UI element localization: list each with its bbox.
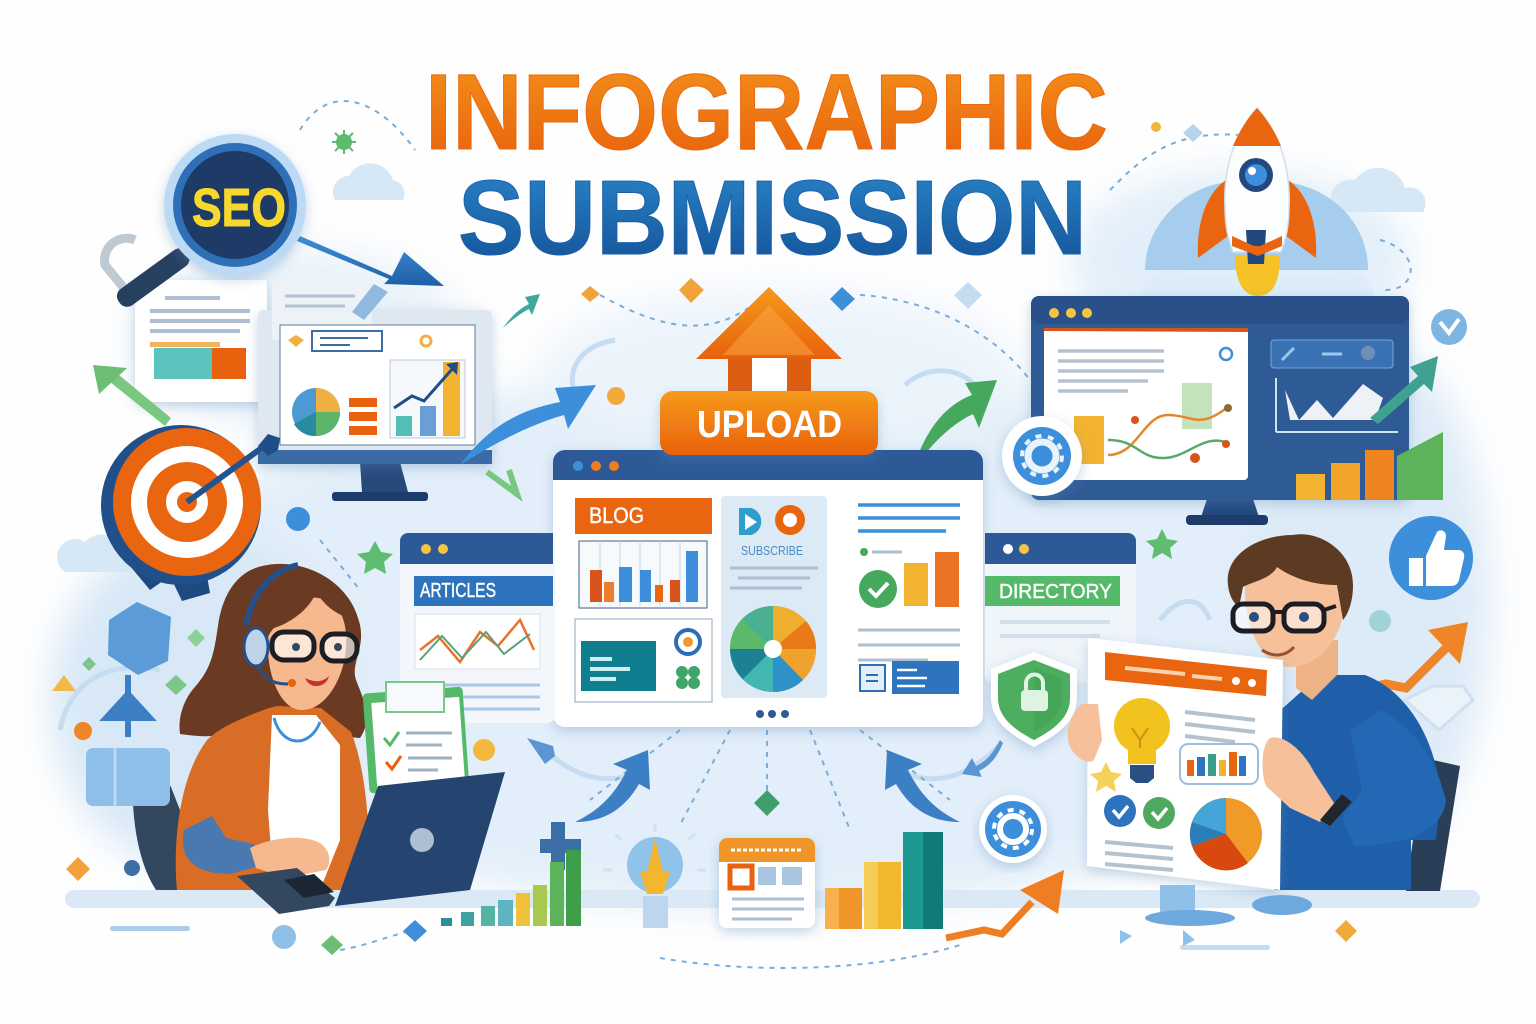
laptop [237,772,505,914]
button: upload: UPLOAD [697,404,842,446]
icon: magnifying glass SEO [104,134,444,310]
bar chart: green steps [441,850,581,926]
blue puzzle figure, left [86,602,171,806]
monitor: right dashboard [1031,296,1443,525]
poster [1068,638,1352,926]
arrow: small teal [503,294,540,328]
icon: plus [540,822,581,870]
SEO document [135,280,267,402]
title [425,51,1108,277]
bar chart: orange and teal [825,832,943,929]
clouds [57,163,1426,572]
main browser panel [553,450,983,727]
arrow: orange rising right [1348,622,1468,692]
panel: articles window: ARTICLES [420,580,496,602]
icon: green virus gear [332,130,356,154]
icon: gear badge [1002,416,1082,496]
man with poster [1228,534,1460,891]
title: INFOGRAPHIC [425,51,1108,172]
heart outline, right [1405,686,1473,730]
arrow: green to right monitor [912,380,997,472]
icon: target with arrow [93,365,280,601]
clipboard checklist [363,682,495,793]
desk line [65,890,1480,950]
title: SUBMISSION [458,159,1087,277]
right column [858,505,960,694]
arrow: orange bottom [946,870,1064,938]
BLOG column [575,498,712,702]
BLOG column: BLOG [589,503,644,528]
icon: small badge check [1431,309,1467,345]
background swirls [60,340,1210,779]
woman at laptop [133,564,369,890]
icon: gear badge lower [979,795,1047,863]
arrow: blue to upload [460,385,596,465]
icon: thumbs up [1389,516,1473,600]
center column: SUBSCRIBE [741,543,803,558]
icon: shield [991,652,1077,747]
arrow: bottom blue pair [527,738,1003,822]
icon: lightbulb [603,824,706,928]
dashed connectors [300,101,1411,968]
shapes: diamonds top [581,122,1203,405]
scatter shapes [52,470,1391,955]
rocket [1140,108,1374,296]
panel: directory window [985,533,1136,683]
monitor: analytics dashboard [258,280,492,501]
panel: directory window: DIRECTORY [999,581,1112,603]
background wash [50,170,1490,910]
button: upload [660,391,878,455]
icon: upload arrow [696,287,842,394]
center column [721,496,827,698]
panel: articles window [400,533,555,723]
panel: small web card [719,838,815,928]
icon: magnifying glass SEO: SEO [192,178,286,238]
